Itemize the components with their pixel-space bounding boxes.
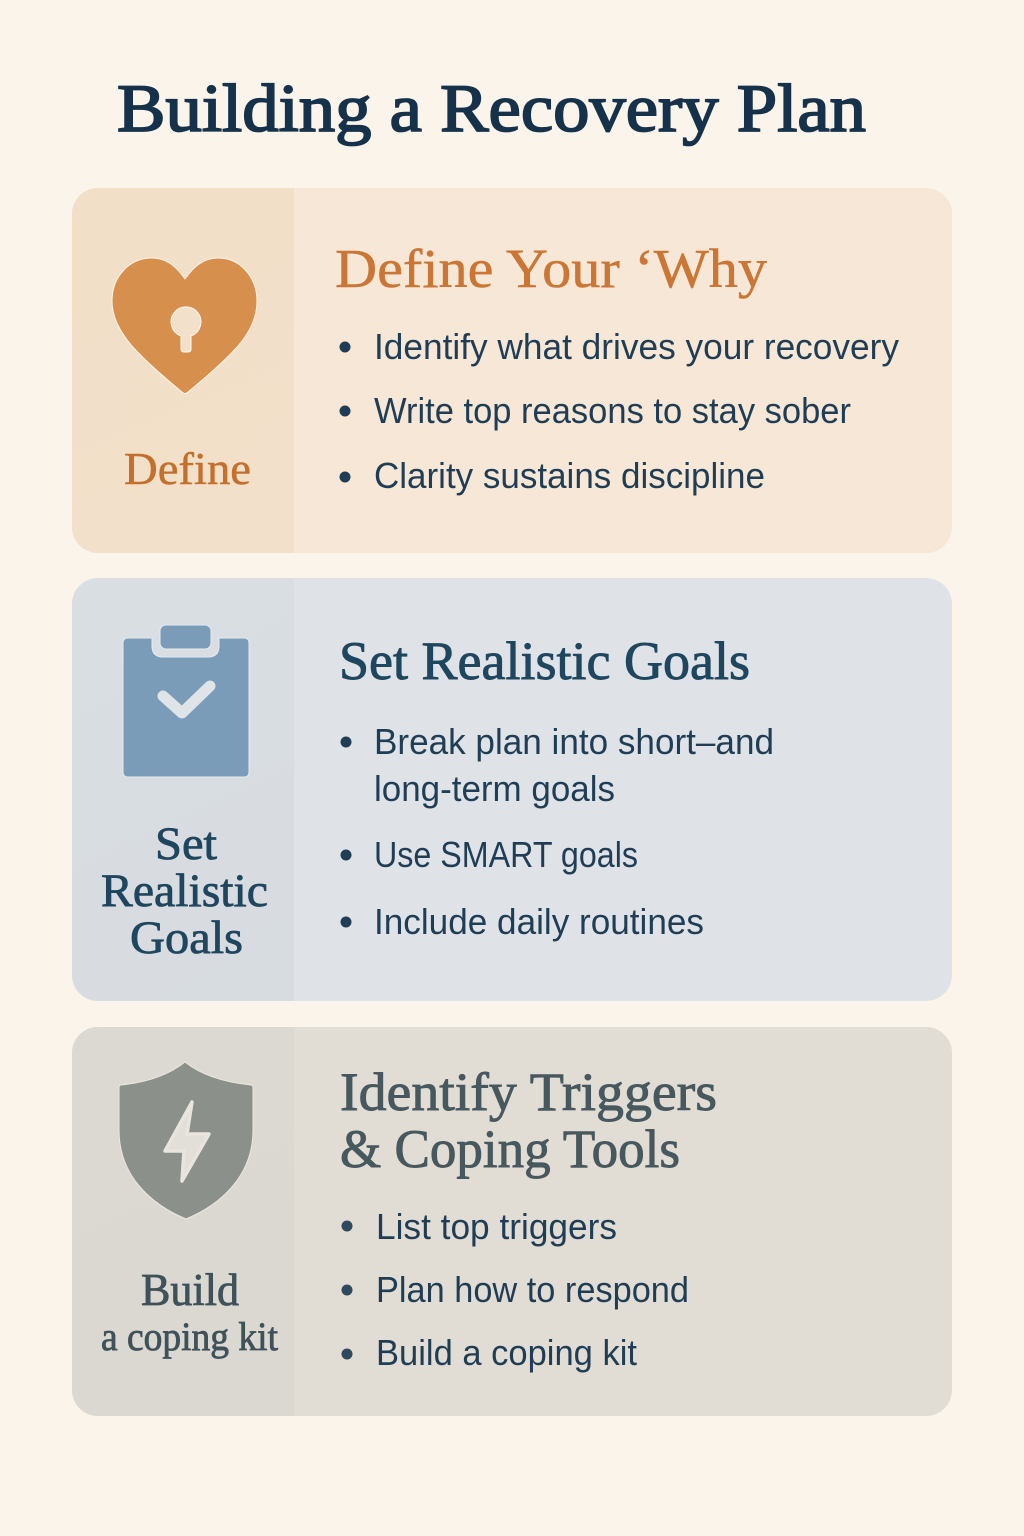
bullet list: goals: Use SMART goals	[374, 834, 638, 875]
bullet list: triggers: Build a coping kit	[376, 1332, 637, 1373]
panel: define your why	[72, 188, 952, 553]
heading: set realistic goals: Set Realistic Goals	[339, 631, 750, 691]
label: set realistic goals: Set	[155, 818, 217, 870]
bullet list: triggers: Plan how to respond	[376, 1269, 689, 1310]
bullet list: define: Clarity sustains discipline	[374, 455, 765, 496]
bullet list: goals	[340, 721, 774, 942]
heading: define your why: Define Your ‘Why	[335, 238, 768, 299]
title: Building a Recovery Plan	[117, 70, 866, 146]
icon: shield with lightning bolt	[119, 1062, 253, 1219]
label: set realistic goals: Goals	[130, 912, 243, 964]
bullet list: define	[340, 326, 900, 496]
label: build a coping kit: a coping kit	[101, 1314, 278, 1359]
heading: identify triggers and coping tools: & Coping Tools	[340, 1119, 680, 1179]
bullet list: define: Write top reasons to stay sober	[374, 390, 851, 431]
label: set realistic goals: Realistic	[101, 865, 268, 917]
bullet list: triggers: List top triggers	[376, 1206, 617, 1247]
label: build a coping kit	[101, 1265, 278, 1359]
label: build a coping kit: Build	[141, 1265, 239, 1315]
label: set realistic goals	[101, 818, 268, 964]
bullet list: define: Identify what drives your recovery	[374, 326, 900, 367]
panel: identify triggers and coping tools	[72, 1027, 952, 1416]
heading: identify triggers and coping tools	[340, 1062, 717, 1179]
bullet list: goals: long-term goals	[374, 768, 615, 809]
bullet list: triggers	[342, 1206, 689, 1373]
bullet list: goals: Include daily routines	[374, 901, 704, 942]
heading: identify triggers and coping tools: Identify Triggers	[340, 1062, 717, 1122]
bullet list: goals: Break plan into short–and	[374, 721, 774, 762]
label: define: Define	[124, 444, 251, 494]
panel: set realistic goals	[72, 578, 952, 1001]
icon: clipboard with check	[123, 625, 249, 777]
icon: heart with keyhole	[112, 258, 257, 394]
